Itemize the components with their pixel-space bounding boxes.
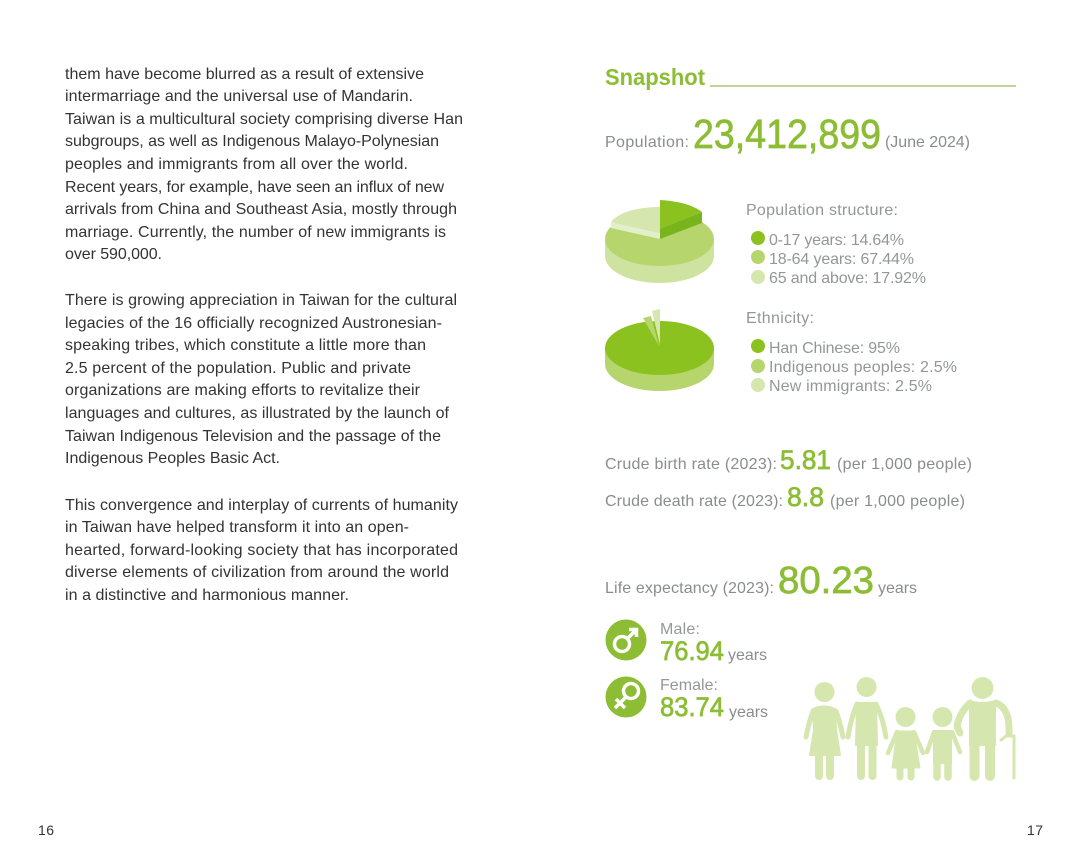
text block: left column paragraph 1: arrivals from China and Southeast Asia, mostly through [65, 201, 457, 218]
elder with cane [957, 677, 1014, 778]
text block: left column paragraph 2: organizations are making efforts to revitalize their [65, 382, 421, 399]
pie chart: ethnicity [605, 309, 714, 391]
stat: female life expectancy: years [729, 704, 768, 721]
stat: crude birth rate: (per 1,000 people) [837, 456, 972, 473]
stat: male life expectancy: Male: [660, 621, 700, 638]
legend: population structure: 0-17 years: 14.64% [769, 232, 904, 249]
text block: left column paragraph 2: There is growing appreciation in Taiwan for the cultural [65, 292, 457, 309]
text block: left column paragraph 2: 2.5 percent of the population. Public and private [65, 360, 411, 377]
text block: left column paragraph 2: speaking tribes, which constitute a little more than [65, 337, 426, 354]
legend: ethnicity [746, 310, 957, 395]
text block: left column paragraph 1 [65, 66, 463, 263]
text block: left column paragraph 3: hearted, forward-looking society that has incorporated [65, 542, 458, 559]
stat: crude birth rate: Crude birth rate (2023): [605, 456, 777, 473]
heading: Snapshot: Snapshot [605, 64, 705, 90]
text block: left column paragraph 2: Taiwan Indigenous Television and the passage of the [65, 428, 441, 445]
text block: left column paragraph 1: Recent years, for example, have seen an influx of new [65, 179, 444, 196]
stat: crude death rate: Crude death rate (2023): [605, 493, 783, 510]
icon: female symbol [606, 676, 646, 718]
stat: population: 23,412,899 [693, 111, 881, 157]
text block: left column paragraph 1: peoples and immigrants from all over the world. [65, 156, 408, 173]
woman [806, 682, 843, 776]
text block: left column paragraph 2: Indigenous Peoples Basic Act. [65, 450, 280, 467]
icon: male symbol [606, 620, 646, 660]
text block: left column paragraph 3 [65, 497, 458, 604]
text block: left column paragraph 3: diverse elements of civilization from around the world [65, 564, 449, 581]
icon: family silhouette [806, 677, 1014, 778]
stat: crude birth rate: 5.81 [780, 445, 831, 475]
legend: population structure [746, 202, 926, 287]
text block: left column paragraph 2 [65, 292, 457, 467]
stat: population: (June 2024) [885, 134, 970, 151]
stat: life expectancy: years [878, 580, 917, 597]
stat: population: Population: [605, 134, 689, 151]
stat: crude death rate: (per 1,000 people) [830, 493, 965, 510]
stat: crude birth rate [605, 445, 972, 475]
text block: left column paragraph 1: marriage. Currently, the number of new immigrants is [65, 224, 446, 241]
stat: female life expectancy: Female: [660, 677, 718, 694]
legend: ethnicity: Indigenous peoples: 2.5% [769, 359, 957, 376]
stat: male life expectancy: years [728, 647, 767, 664]
stat: male life expectancy: 76.94 [660, 636, 724, 666]
text block: left column paragraph 2: legacies of the 16 officially recognized Austronesian- [65, 315, 442, 332]
pie chart: population structure [605, 200, 714, 283]
stat: population [605, 111, 970, 157]
text block: left column paragraph 3: in Taiwan have helped transform it into an open- [65, 519, 409, 536]
stat: female life expectancy [660, 677, 768, 722]
text block: left column paragraph 1: subgroups, as well as Indigenous Malayo-Polynesian [65, 133, 439, 150]
page number: 16: 16 [38, 822, 54, 838]
text block: left column paragraph 1: intermarriage and the universal use of Mandarin. [65, 88, 413, 105]
legend: ethnicity: Ethnicity: [746, 310, 814, 327]
stat: life expectancy: Life expectancy (2023): [605, 580, 774, 597]
text block: left column paragraph 3: in a distinctive and harmonious manner. [65, 587, 349, 604]
legend: population structure: Population structure: [746, 202, 898, 219]
text block: left column paragraph 3: This convergence and interplay of currents of humanity [65, 497, 458, 514]
legend: ethnicity: New immigrants: 2.5% [769, 378, 932, 395]
stat: life expectancy [605, 560, 917, 602]
stat: life expectancy: 80.23 [778, 560, 874, 602]
legend: population structure: 65 and above: 17.92% [769, 270, 926, 287]
stat: male life expectancy [660, 621, 767, 666]
page number: 17: 17 [1027, 822, 1043, 838]
boy [927, 707, 960, 777]
text block: left column paragraph 2: languages and cultures, as illustrated by the launch of [65, 405, 450, 422]
legend: population structure: 18-64 years: 67.44% [769, 251, 914, 268]
girl [888, 707, 923, 777]
text block: left column paragraph 1: over 590,000. [65, 246, 162, 263]
text block: left column paragraph 1: them have become blurred as a result of extensive [65, 66, 424, 83]
stat: female life expectancy: 83.74 [660, 692, 724, 722]
stat: crude death rate [605, 482, 965, 512]
legend: ethnicity: Han Chinese: 95% [769, 340, 900, 357]
text block: left column paragraph 1: Taiwan is a multicultural society comprising diverse Han [65, 111, 463, 128]
stat: crude death rate: 8.8 [787, 482, 824, 512]
man [848, 677, 886, 776]
